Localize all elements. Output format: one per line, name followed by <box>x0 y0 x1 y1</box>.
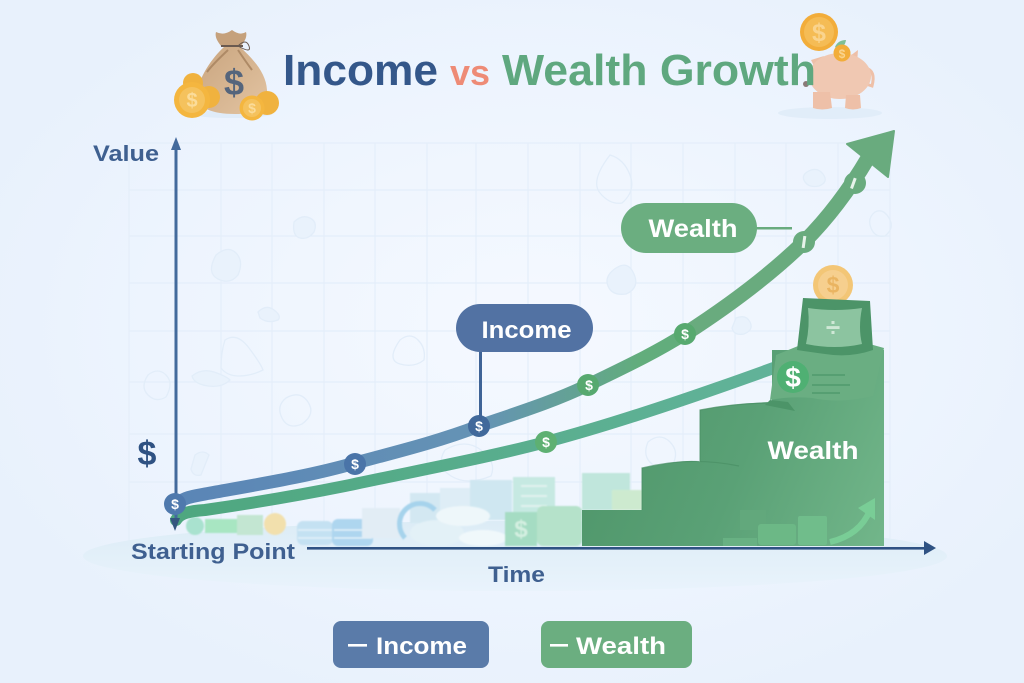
axis labels <box>93 141 545 587</box>
title <box>283 46 816 95</box>
legend: wealth: Wealth <box>576 633 666 660</box>
income callout <box>456 304 593 420</box>
wealth callout: Wealth <box>648 215 738 243</box>
icon: money bag <box>192 30 272 118</box>
income markers <box>164 415 490 515</box>
icon: piggy bank <box>778 50 882 119</box>
icon: coins: $ <box>186 90 198 112</box>
income markers: $ <box>475 418 483 434</box>
axis labels: Starting Point <box>131 539 296 564</box>
wealth markers: $ <box>681 326 689 342</box>
icon: coins: $ <box>248 100 256 116</box>
wealth staircase <box>582 350 884 546</box>
wealth markers: $ <box>585 377 593 393</box>
income markers: $ <box>171 496 179 512</box>
wealth line (teal) <box>176 362 790 520</box>
icon: falling coins: $ <box>812 19 826 47</box>
small stacks at foot of the staircase <box>723 498 875 546</box>
income markers: $ <box>351 456 359 472</box>
icon: falling coins: $ <box>839 47 846 61</box>
title: Income <box>283 46 438 95</box>
income callout: Income <box>482 317 572 344</box>
title: Wealth Growth <box>502 46 816 95</box>
cash bundle lower <box>765 333 884 411</box>
faded coin and cash stacks <box>186 473 642 546</box>
legend: income: Income <box>376 633 467 660</box>
icon: money bag: $ <box>224 62 244 103</box>
title: vs <box>450 52 490 93</box>
wealth markers <box>535 172 866 453</box>
value axis <box>170 137 181 531</box>
faded coin and cash stacks: $ <box>514 516 528 543</box>
wealth markers: $ <box>542 434 550 450</box>
chart grid <box>129 143 890 545</box>
axis labels: Time <box>488 562 545 587</box>
top coin <box>813 265 853 305</box>
staircase label: Wealth <box>768 437 858 465</box>
cash bundle lower: $ <box>785 362 801 393</box>
step edges <box>642 403 775 510</box>
time axis <box>307 541 936 555</box>
ground shadow <box>83 521 947 591</box>
wealth callout <box>621 203 792 253</box>
top coin: $ <box>827 272 840 298</box>
icon: coins <box>174 73 279 120</box>
legend: wealth <box>541 621 692 668</box>
axis labels: Value <box>93 141 159 166</box>
income to wealth growth arrow <box>178 131 894 503</box>
cash bundle upper: ÷ <box>826 312 840 342</box>
icon: falling coins <box>800 13 850 62</box>
dollar symbol: $ <box>138 435 157 473</box>
cash bundle upper <box>797 298 873 355</box>
faint background doodles <box>144 155 891 481</box>
legend: income <box>333 621 489 668</box>
